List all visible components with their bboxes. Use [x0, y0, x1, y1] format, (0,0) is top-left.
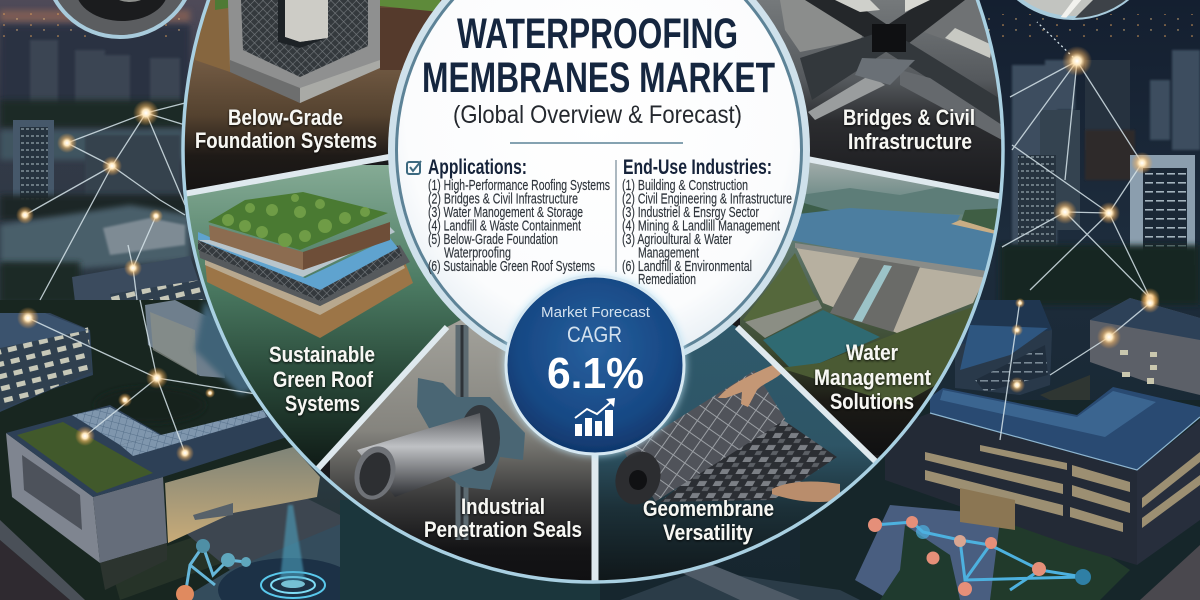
- panel: sustainable green roof systems: [187, 165, 461, 465]
- label: industrial penetration seals: [424, 494, 582, 542]
- label: geomembrane versatility: [643, 496, 774, 545]
- network lines and glowing nodes: [16, 22, 1160, 462]
- end-use industries list: End-Use Industries:: [623, 156, 772, 179]
- end-use industries list: (3) Agrioultural & Water: [622, 232, 732, 248]
- label: sustainable green roof systems: [269, 342, 375, 416]
- panel: center title circle: [388, 0, 810, 375]
- end-use industries list: [622, 156, 792, 288]
- end-use industries list: (1) Building & Construction: [622, 178, 748, 194]
- background: main building right: [885, 387, 1200, 565]
- background: left night city campus: [0, 0, 600, 600]
- label: bridges and civil infrastructure: Infrastructure: [848, 129, 972, 154]
- applications list: (2) Bridges & Civil Infrastructure: [428, 192, 578, 208]
- icon: molecule right: [868, 516, 1091, 596]
- panel: water management solutions: [740, 155, 1010, 455]
- label: water management solutions: Water: [846, 340, 898, 365]
- applications list: Applications:: [428, 156, 527, 179]
- label: below-grade foundation systems: [195, 105, 377, 153]
- end-use industries list: Management: [638, 246, 699, 262]
- label: water management solutions: Management: [814, 365, 932, 390]
- label: below-grade foundation systems: Below-Grade: [228, 105, 343, 130]
- label: bridges and civil infrastructure: [843, 105, 975, 154]
- panel: geomembrane versatility: [598, 324, 873, 580]
- title: [422, 10, 775, 102]
- applications list: (3) Water Manogement & Storage: [428, 205, 583, 221]
- end-use industries list: (2) Civil Engineering & Infrastructure: [622, 192, 792, 208]
- column divider: [615, 160, 617, 272]
- label: sustainable green roof systems: Systems: [285, 391, 360, 416]
- label: bridges and civil infrastructure: Bridges & Civil: [843, 105, 975, 130]
- label: geomembrane versatility: Versatility: [663, 520, 754, 545]
- panel: bridges and civil infrastructure: [756, 0, 1002, 168]
- label: sustainable green roof systems: Sustainable: [269, 342, 375, 367]
- label: industrial penetration seals: Industrial: [461, 494, 545, 519]
- applications list: (5) Below-Grade Foundation: [428, 232, 558, 248]
- icon: top right inset circle: [1016, 0, 1130, 20]
- icon: growth chart: [575, 398, 615, 436]
- label: sustainable green roof systems: Green Roof: [273, 367, 374, 392]
- title: MEMBRANES MARKET: [422, 54, 775, 102]
- label: industrial penetration seals: Penetration Seals: [424, 517, 582, 542]
- applications list: (1) High-Performance Roofing Systems: [428, 178, 610, 194]
- panel: circular wedge wheel: [184, 0, 1002, 580]
- outer wheel ring: [183, 0, 1003, 582]
- label: water management solutions: Solutions: [830, 389, 914, 414]
- applications list: Waterproofing: [444, 246, 511, 262]
- icon: tire inset circle: [45, 0, 195, 37]
- applications list: (6) Sustainable Green Roof Systems: [428, 259, 595, 275]
- label: below-grade foundation systems: Foundation Systems: [195, 128, 377, 153]
- callout: market forecast CAGR badge: Market Forecast: [541, 304, 651, 321]
- callout: market forecast CAGR badge: [506, 276, 684, 454]
- applications list: [407, 156, 610, 275]
- icon: checkbox: [407, 161, 421, 174]
- title: WATERPROOFING: [457, 10, 738, 58]
- end-use industries list: (6) Landfill & Environmental: [622, 259, 752, 275]
- label: geomembrane versatility: Geomembrane: [643, 496, 774, 521]
- wedge divider lines: [186, 154, 1000, 580]
- callout: market forecast CAGR badge: 6.1%: [547, 349, 644, 398]
- divider: [510, 142, 683, 144]
- label: water management solutions: [814, 340, 932, 414]
- icon: fountain with glowing rings: [218, 505, 362, 600]
- background: right night city campus: [340, 0, 1200, 600]
- background: main building left: [6, 405, 320, 590]
- end-use industries list: Remediation: [638, 272, 696, 288]
- panel: below-grade foundation systems: [185, 0, 442, 153]
- callout: market forecast CAGR badge: CAGR: [567, 322, 622, 347]
- subtitle: (Global Overview & Forecast): [453, 101, 742, 129]
- applications list: (4) Landfill & Waste Containment: [428, 218, 581, 234]
- end-use industries list: (4) Mining & Landlill Management: [622, 218, 780, 234]
- end-use industries list: (3) Industriel & Ensrgy Sector: [622, 205, 759, 221]
- panel: industrial penetration seals: [330, 320, 592, 580]
- icon: molecule left: [176, 539, 251, 600]
